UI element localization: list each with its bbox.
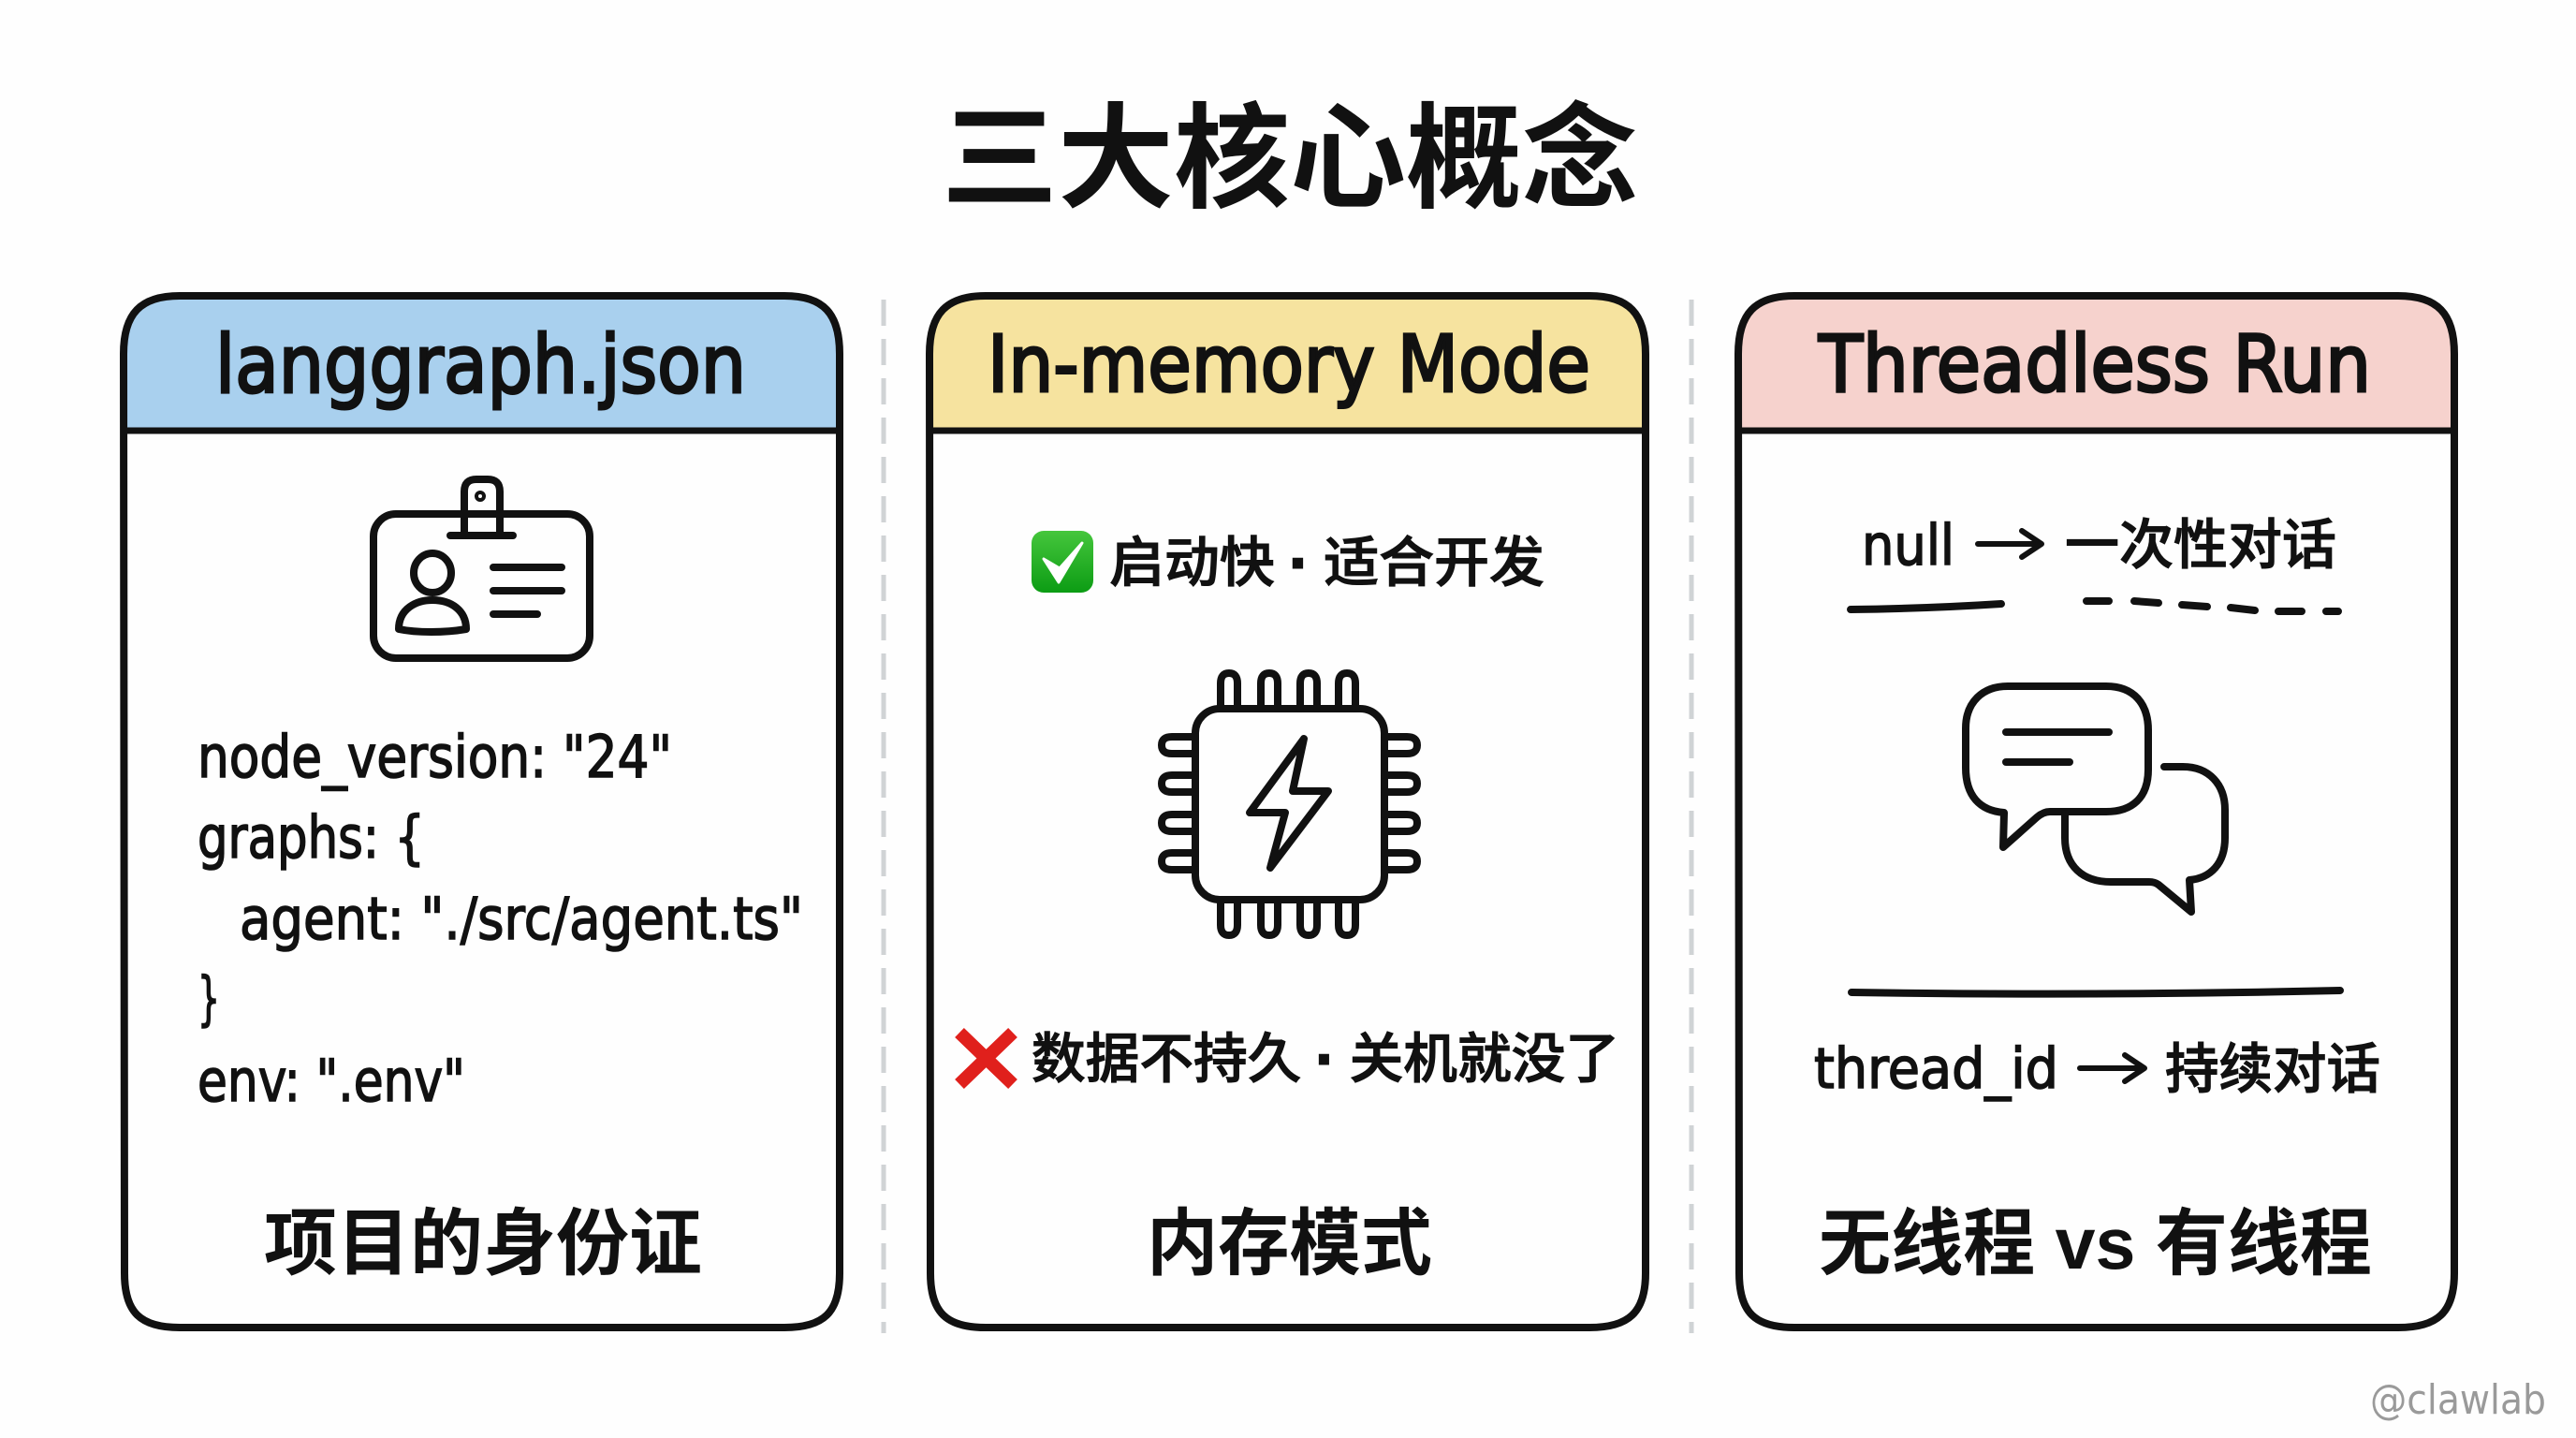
code snippet: agent: "./src/agent.ts": [240, 885, 803, 953]
header band: in-memory mode: In-memory Mode: [988, 318, 1590, 410]
watermark: @clawlab: [2370, 1376, 2546, 1424]
thread_id label: [1814, 1036, 2380, 1102]
code snippet: graphs: {: [198, 803, 425, 872]
header band: langgraph.json: langgraph.json: [215, 318, 746, 412]
divider line: [1852, 990, 2340, 994]
panel: langgraph.json: [124, 296, 840, 1328]
code snippet: [198, 723, 803, 1115]
icon: red cross: [959, 1033, 1013, 1084]
benefit text: 启动快 · 适合开发: [1109, 533, 1544, 594]
caption: 项目的身份证: [264, 1202, 702, 1284]
thread_id label: thread_id: [1814, 1036, 2058, 1102]
underline: solid and dashed: [1851, 601, 2338, 611]
thread_id label: 持续对话: [2165, 1039, 2380, 1100]
panel: threadless run: [1738, 296, 2454, 1328]
panel: in-memory mode: [929, 296, 1646, 1328]
code snippet: node_version: "24": [198, 723, 672, 791]
caption: 内存模式: [1147, 1202, 1432, 1284]
header band: threadless run: [1738, 296, 2454, 431]
null label: 一次性对话: [2065, 515, 2336, 576]
caption: 无线程 vs 有线程: [1819, 1202, 2372, 1284]
code snippet: env: ".env": [198, 1047, 465, 1115]
drawback text: 数据不持久 · 关机就没了: [1032, 1029, 1619, 1090]
title: 三大核心概念: [942, 95, 1638, 223]
icon: chip with lightning: [1162, 673, 1417, 935]
header band: langgraph.json: [124, 296, 840, 431]
code snippet: }: [198, 964, 220, 1033]
null label: null: [1862, 513, 1954, 579]
null label: [1862, 513, 2336, 579]
icon: id badge: [373, 479, 590, 658]
icon: green check: [1032, 531, 1093, 593]
header band: threadless run: Threadless Run: [1818, 318, 2371, 410]
header band: in-memory mode: [929, 296, 1646, 431]
icon: chat bubbles: [1966, 686, 2225, 912]
